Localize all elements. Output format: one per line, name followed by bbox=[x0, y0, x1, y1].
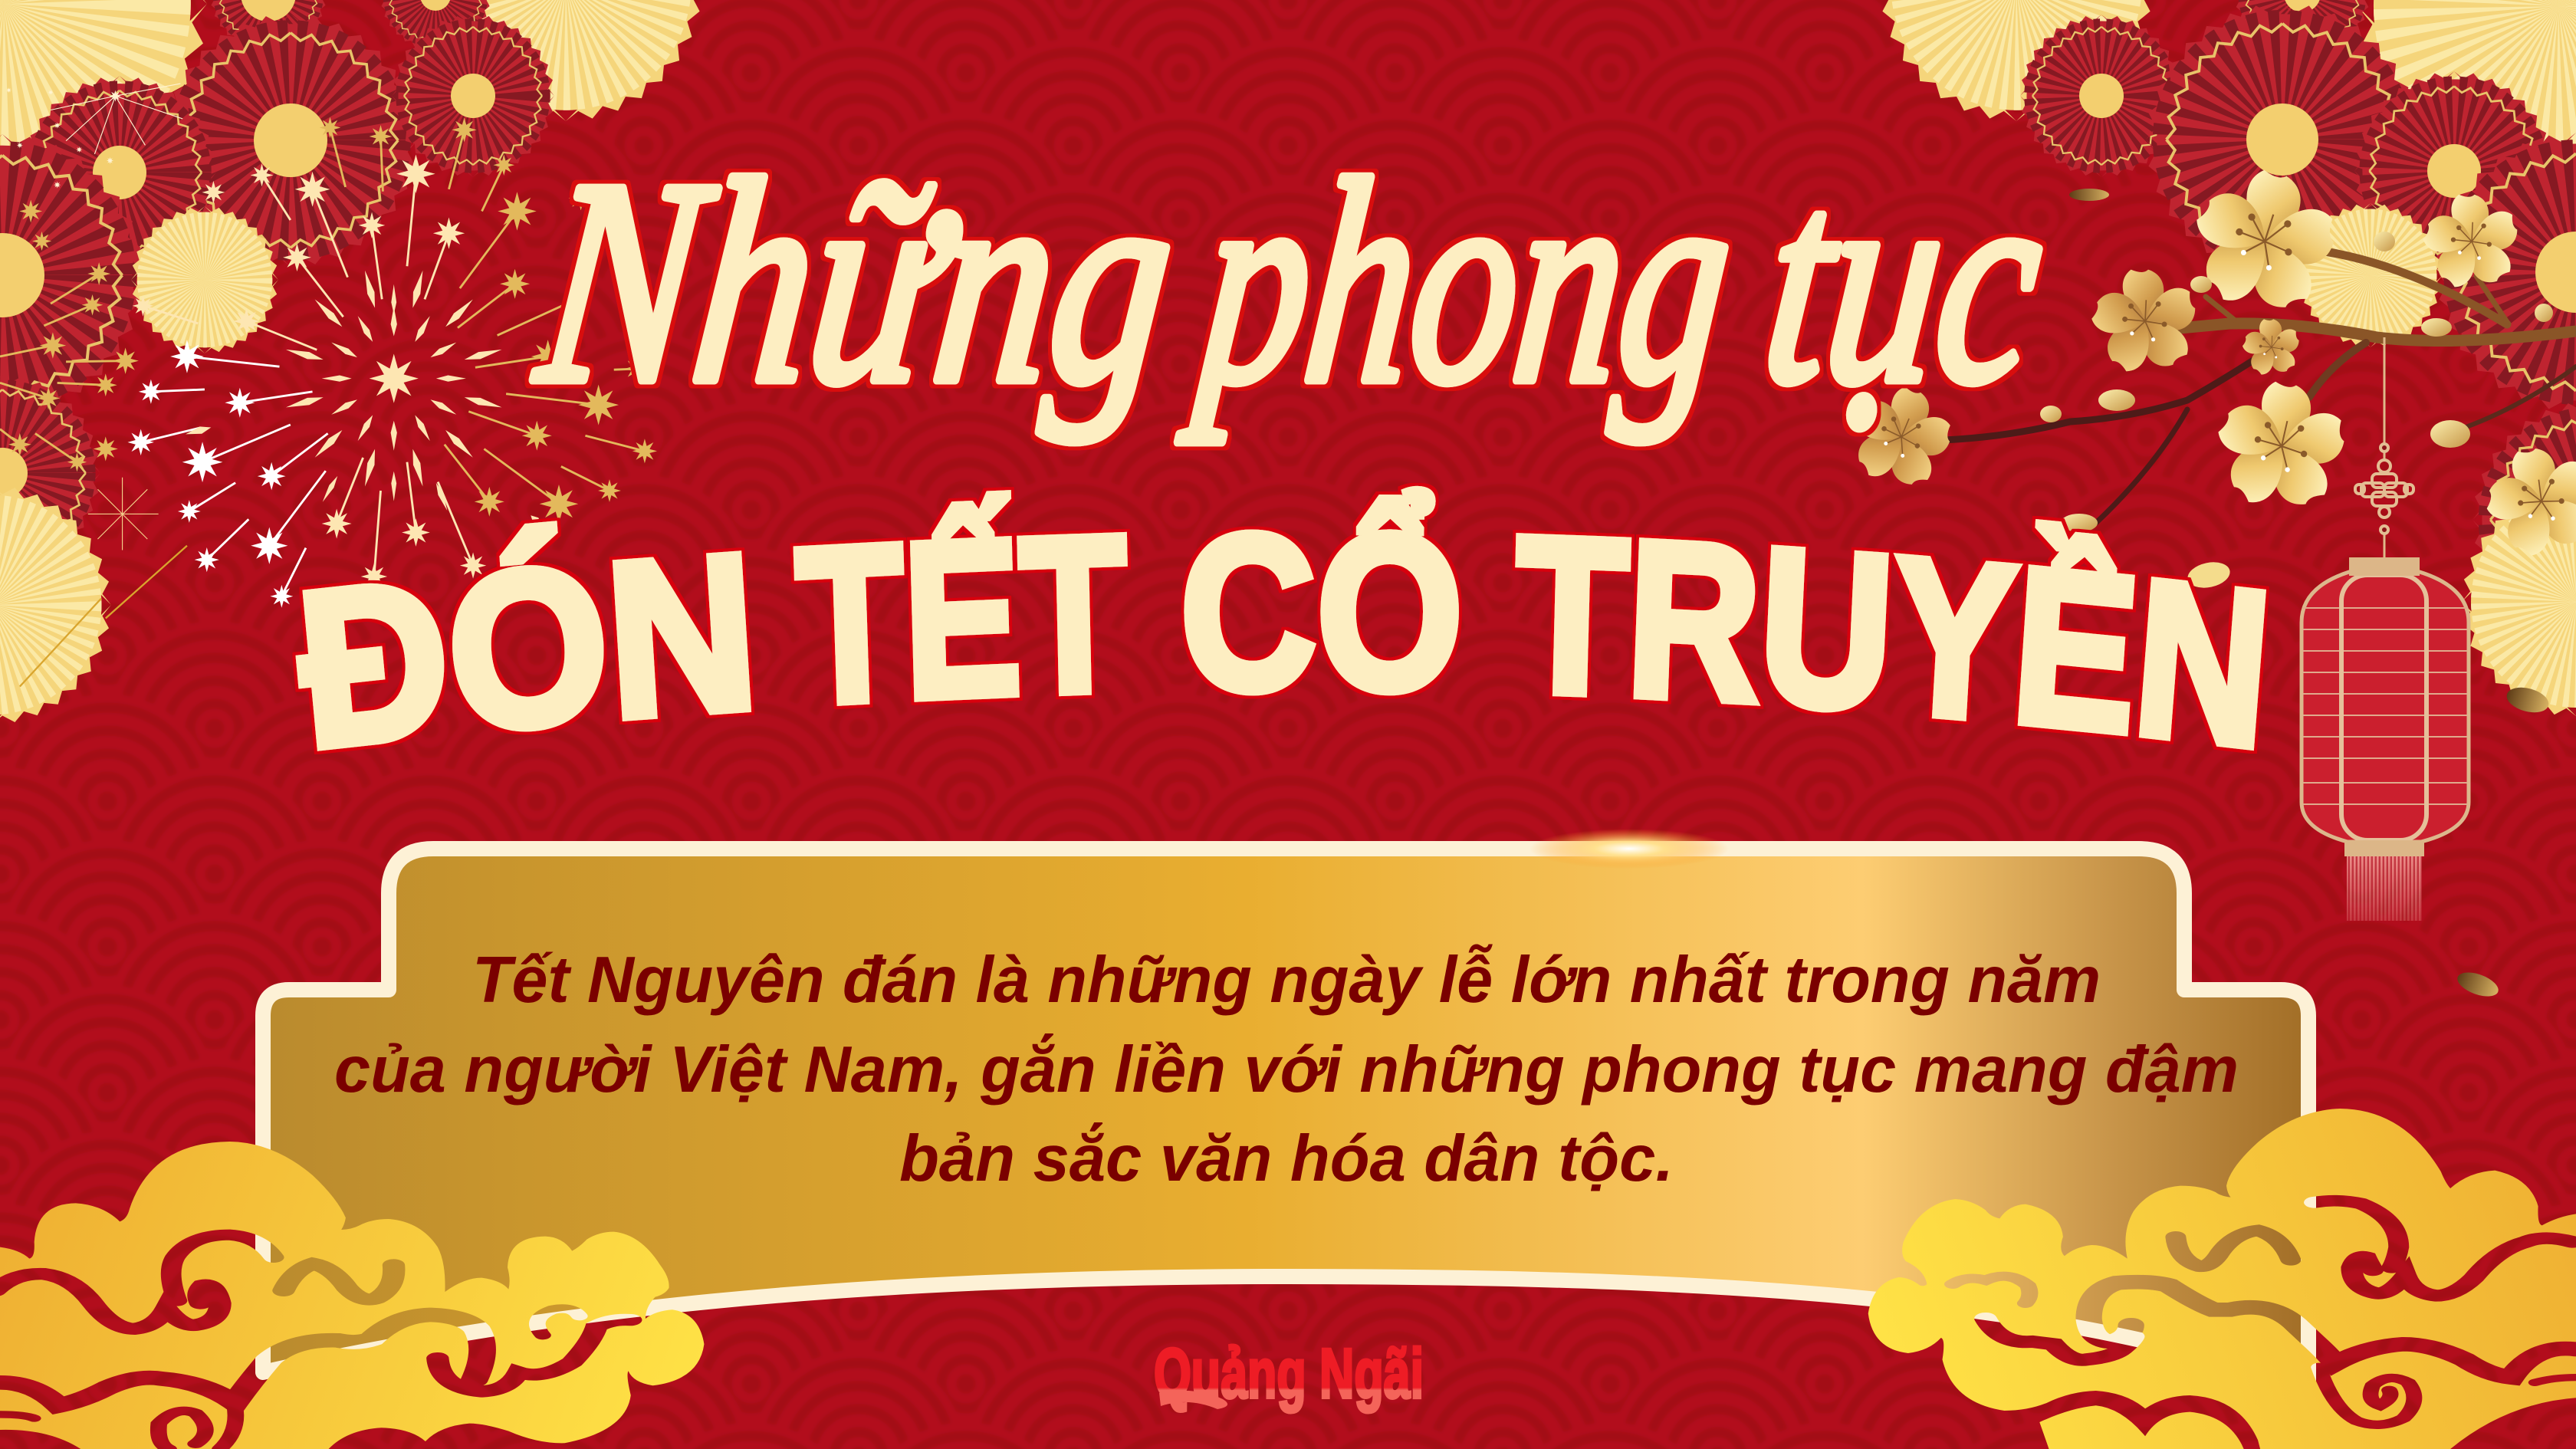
logo: Quảng Ngãi: Quảng Ngãi bbox=[1154, 1335, 1424, 1413]
panel: glow on top edge bbox=[1530, 829, 1729, 869]
lantern: horizontal ribs bbox=[2303, 608, 2467, 804]
title: script line bbox=[524, 120, 2055, 443]
panel: intro text: bản sắc văn hóa dân tộc. bbox=[899, 1122, 1674, 1195]
panel: intro text: của người Việt Nam, gắn liền với những phong tục mang đậm bbox=[334, 1033, 2239, 1106]
rosette: right edge bbox=[2436, 133, 2576, 412]
lantern: body bbox=[2302, 572, 2469, 842]
title: script line: tục bbox=[1753, 120, 2055, 443]
rosette: left edge lower bbox=[0, 375, 100, 571]
lantern: inner frame bbox=[2341, 575, 2426, 840]
fan: top centre left bbox=[429, 0, 702, 121]
firework: cream stars and centre bbox=[133, 154, 546, 590]
blossom flowers bbox=[1834, 156, 2576, 567]
rosette: far right upper bbox=[2354, 71, 2554, 271]
firework: small sparkle over top-left fan bbox=[6, 84, 182, 550]
lantern: bottom cap bbox=[2344, 840, 2424, 856]
rosette: left upper bbox=[23, 76, 216, 269]
title: script line: Những bbox=[524, 120, 1187, 443]
rosette: right edge lower bbox=[2472, 401, 2576, 639]
branch: brown and dark twigs bbox=[1944, 249, 2576, 523]
panel: gold plaque with cream border bbox=[263, 849, 2308, 1388]
rosette: left edge middle bbox=[0, 134, 143, 416]
firework: gold stars on the right bbox=[0, 117, 659, 523]
fan: bottom right bbox=[2462, 487, 2576, 717]
rosette: large top left bbox=[164, 14, 417, 267]
logo: Quảng Ngãi bbox=[1154, 1335, 1424, 1413]
fan: bottom left bbox=[0, 485, 111, 724]
title: arched bold line: TRUYỀN bbox=[1512, 516, 2269, 754]
title: arched bold line: ĐÓN bbox=[293, 518, 754, 754]
firework: white stars on the left bbox=[127, 340, 328, 608]
title: script line: phong bbox=[1176, 120, 1745, 443]
lantern: tassel bbox=[2347, 856, 2422, 921]
rosette: top small centre bbox=[380, 0, 491, 51]
fan: top right corner bbox=[2358, 0, 2576, 207]
cloud: bottom left bbox=[0, 1142, 704, 1449]
fan: top left bbox=[0, 0, 207, 207]
falling streaks lower left bbox=[20, 546, 187, 686]
rosette: top centre bbox=[392, 15, 554, 177]
plum blossom branches bbox=[1834, 156, 2576, 1001]
rosette: top right small bbox=[2235, 0, 2370, 61]
rosette: right small bbox=[2020, 15, 2183, 177]
fan: behind branch bbox=[2298, 203, 2443, 347]
firework burst bbox=[0, 84, 659, 686]
intro panel bbox=[263, 829, 2308, 1388]
blossom buds and fallen petals bbox=[1957, 189, 2553, 1001]
lantern: top cap bbox=[2349, 557, 2420, 576]
title: arched bold line: CỔ bbox=[1181, 483, 1462, 699]
rosette: top small left bbox=[210, 0, 327, 52]
title: arched bold line bbox=[293, 483, 2269, 754]
panel: intro text bbox=[334, 944, 2239, 1195]
rosette: right large bbox=[2146, 3, 2419, 276]
lantern: string bbox=[2383, 337, 2386, 557]
lantern bbox=[2302, 337, 2469, 921]
panel: intro text: Tết Nguyên đán là những ngày lễ lớn nhất trong năm bbox=[472, 944, 2101, 1017]
fan: small left bbox=[131, 206, 278, 353]
cloud: bottom right bbox=[1868, 1109, 2576, 1449]
fan: top right inner bbox=[1880, 0, 2153, 121]
lantern: Chinese knot bbox=[2355, 444, 2413, 534]
title: arched bold line: TẾT bbox=[790, 487, 1131, 709]
